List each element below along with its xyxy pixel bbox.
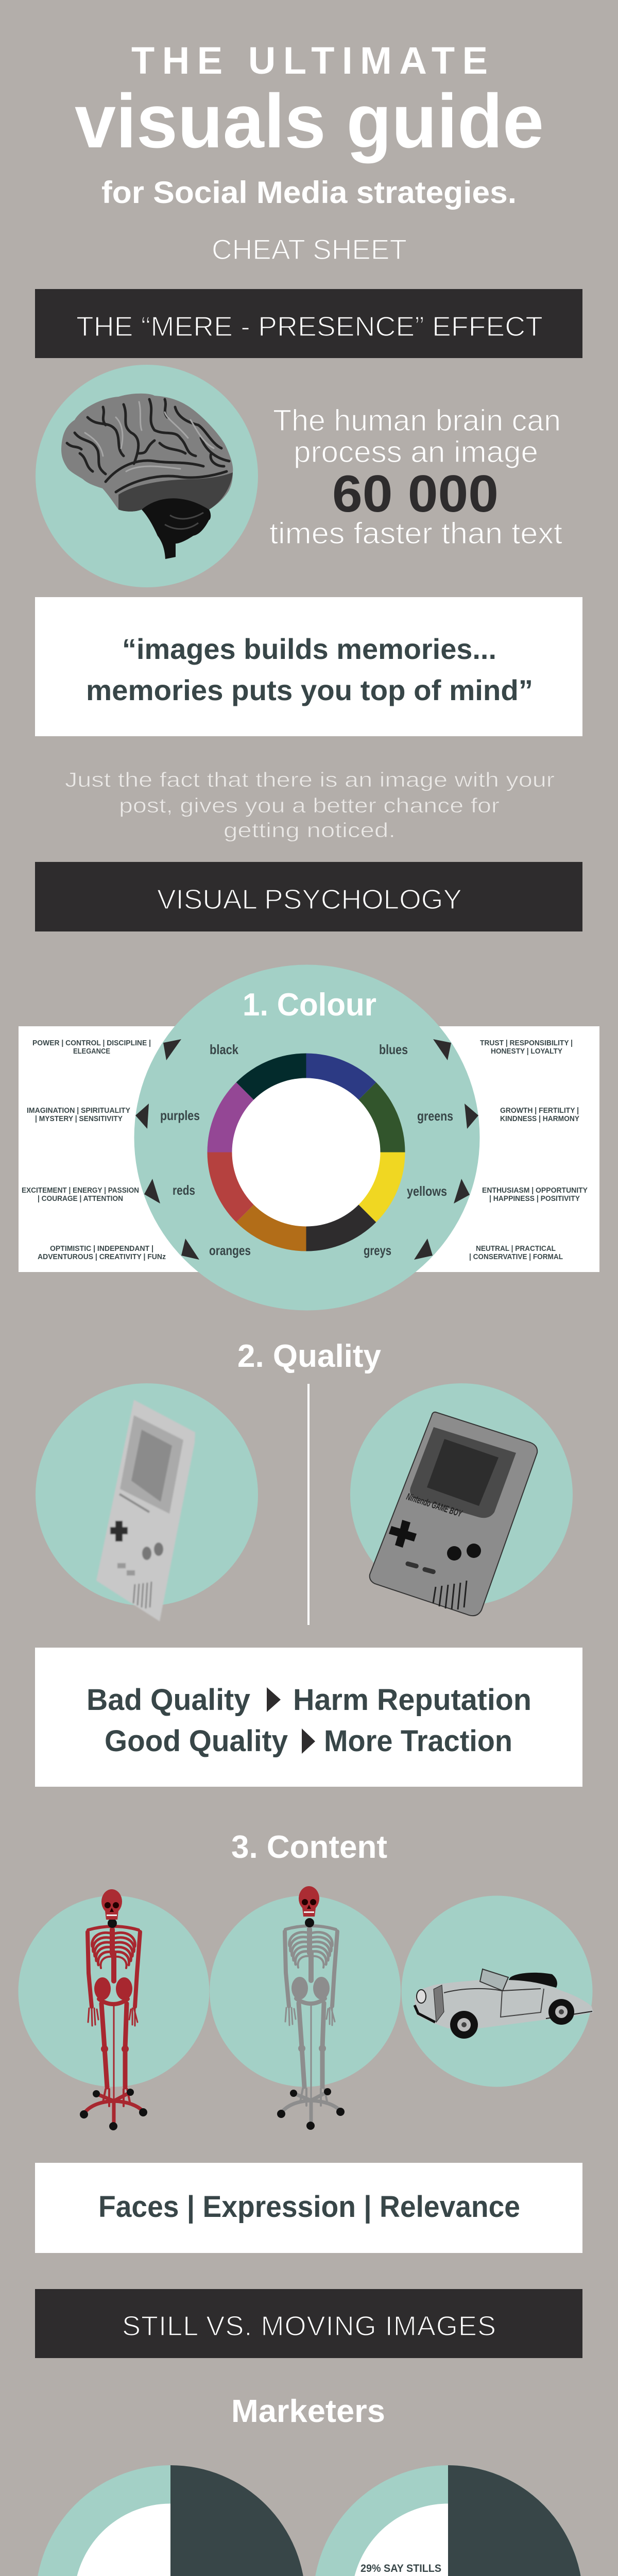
title: visuals guide: visuals guide [75, 79, 544, 164]
text: colour meanings left: | MYSTERY | SENSITIVITY [35, 1115, 123, 1123]
panel: quote: “images builds memories... [122, 633, 496, 665]
heading: marketers: Marketers [231, 2394, 385, 2429]
text: colour meanings left: | COURAGE | ATTENTION [38, 1195, 123, 1203]
colour labels: purples [160, 1108, 200, 1123]
text: colour meanings right: TRUST | RESPONSIBILITY | [480, 1039, 573, 1047]
icon: high quality game boy [350, 1383, 573, 1616]
icon: brain in circle [36, 365, 258, 587]
title: the ultimate: THE ULTIMATE [131, 39, 488, 82]
colour labels: yellows [407, 1183, 447, 1199]
text: just the fact: getting noticed. [224, 819, 396, 842]
text: colour meanings right: NEUTRAL | PRACTICAL [476, 1245, 556, 1253]
heading: 1. colour: 1. Colour [243, 987, 376, 1023]
panel: faces expression relevance [35, 2163, 582, 2253]
text: brain stat: The human brain can [273, 404, 561, 437]
logo text: Nintendo GAME BOY [405, 1492, 464, 1520]
text: colour meanings left: ELEGANCE [73, 1047, 110, 1056]
chart: colour donut [207, 1053, 405, 1251]
image: red skeleton [19, 1889, 209, 2130]
title block [75, 39, 544, 265]
section header: still vs moving: STILL VS. MOVING IMAGES [122, 2311, 496, 2342]
heading: 2. quality: 2. Quality [237, 1338, 382, 1374]
divider [307, 1384, 310, 1625]
panel: colour wheel circle [134, 964, 480, 1311]
text: just the fact: post, gives you a better chance for [119, 794, 500, 817]
colour labels [160, 1042, 453, 1258]
panel: colour white band [19, 1026, 599, 1272]
section header: mere presence [35, 289, 582, 358]
heading: 3. content: 3. Content [231, 1829, 387, 1865]
cheat sheet label: CHEAT SHEET [212, 233, 407, 265]
text: colour meanings right: HONESTY | LOYALTY [491, 1047, 562, 1056]
panel: quality result: More Traction [324, 1724, 512, 1758]
subtitle: for Social Media strategies. [101, 175, 517, 210]
colour labels: greys [364, 1243, 391, 1258]
image: vintage car [402, 1896, 593, 2087]
text: colour meanings left: EXCITEMENT | ENERGY | PASSION [22, 1187, 139, 1195]
text: just the fact [65, 769, 555, 842]
section header: visual psychology: VISUAL PSYCHOLOGY [157, 884, 462, 915]
text: colour meanings left [22, 1039, 166, 1261]
section header: visual psychology [35, 862, 582, 931]
panel: quality result: Harm Reputation [293, 1683, 531, 1717]
text: colour meanings right: KINDNESS | HARMONY [500, 1115, 579, 1123]
colour labels: reds [173, 1182, 195, 1198]
text: colour meanings right: | HAPPINESS | POSITIVITY [489, 1195, 580, 1203]
arrow [302, 1728, 315, 1754]
arrows: colour wheel pointers [135, 1039, 478, 1260]
chart: prefer pie [36, 2465, 305, 2576]
colour labels: blues [379, 1042, 408, 1057]
text: colour meanings left: POWER | CONTROL | DISCIPLINE | [32, 1039, 151, 1047]
colour labels: oranges [209, 1243, 251, 1258]
colour labels: black [210, 1042, 238, 1057]
text: brain stat [269, 404, 562, 550]
text: just the fact: Just the fact that there is an image with your [65, 769, 555, 791]
panel: faces expression relevance: Faces | Expression | Relevance [98, 2190, 520, 2224]
chart: engagement pie [313, 2465, 583, 2576]
text: colour meanings left: ADVENTUROUS | CREATIVITY | FUNz [38, 1253, 166, 1261]
panel: quote [35, 597, 582, 736]
image: grey skeleton with red skull [210, 1886, 401, 2130]
text: colour meanings right [469, 1039, 588, 1261]
text: colour meanings right: ENTHUSIASM | OPPORTUNITY [482, 1187, 588, 1195]
icon: low quality game boy [36, 1383, 258, 1621]
text: colour meanings right: GROWTH | FERTILITY | [500, 1107, 579, 1115]
text: colour meanings left: IMAGINATION | SPIRITUALITY [27, 1107, 130, 1115]
text: brain stat: times faster than text [269, 517, 562, 550]
chart: engagement pie: 29% SAY STILLS [360, 2563, 441, 2574]
text: colour meanings right: | CONSERVATIVE | FORMAL [469, 1253, 563, 1261]
arrow [267, 1687, 281, 1712]
stat: 60 000: 60 000 [332, 465, 499, 523]
panel: quality result [35, 1648, 582, 1787]
text: brain stat: process an image [294, 435, 538, 469]
section header: still vs moving [35, 2289, 582, 2358]
colour labels: greens [417, 1108, 453, 1124]
text: colour meanings left: OPTIMISTIC | INDEPENDANT | [50, 1245, 153, 1253]
panel: quality result: Good Quality [105, 1724, 288, 1758]
panel: quote: memories puts you top of mind” [86, 674, 533, 706]
panel: quality result: Bad Quality [87, 1683, 250, 1717]
section header: mere presence: THE “MERE - PRESENCE” EFFECT [76, 311, 543, 342]
